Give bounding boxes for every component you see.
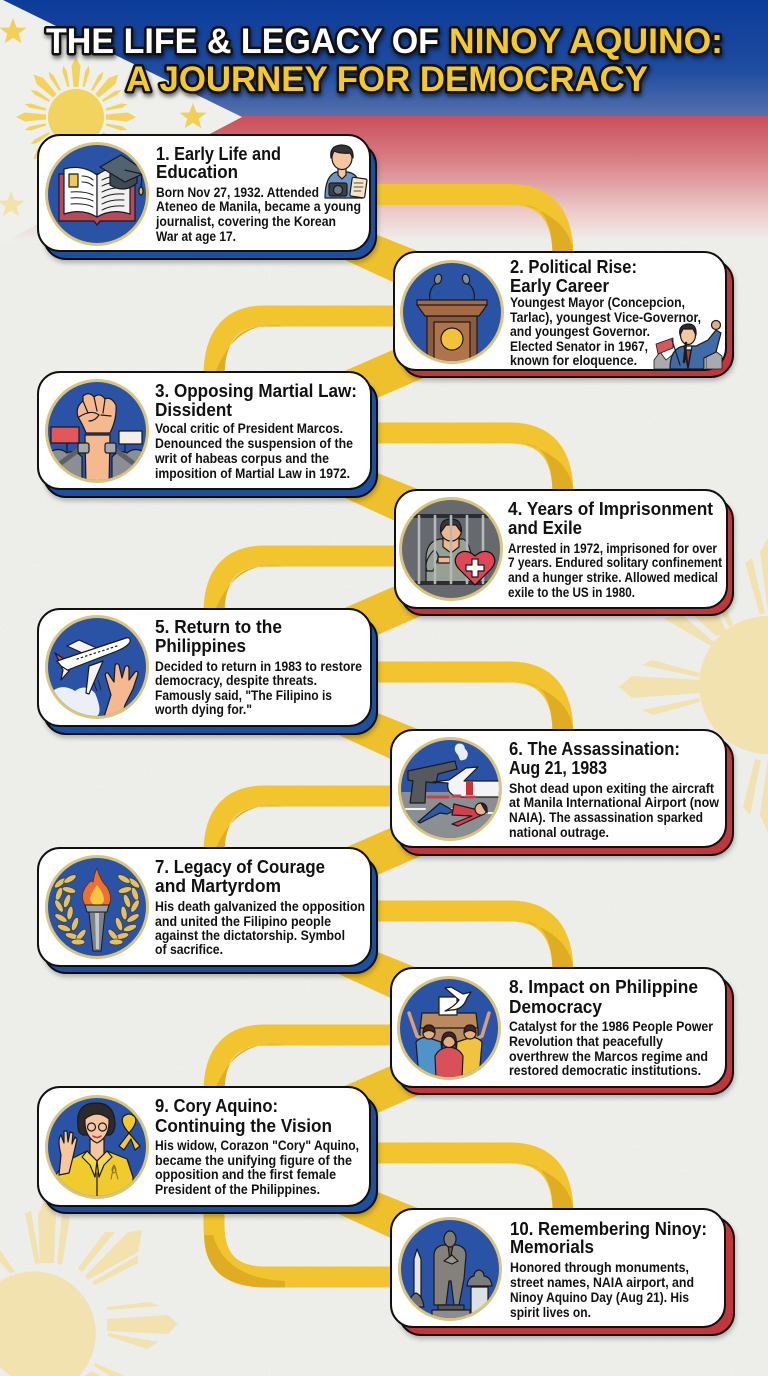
icon: orator with crowd [654,320,722,369]
body text [508,541,722,600]
body text [510,295,701,368]
panel: card 10 [391,1209,734,1335]
title: THE LIFE & LEGACY OF [46,22,439,61]
heading [155,616,282,656]
icon: torch and laurel wreath [45,855,149,959]
heading: and Martyrdom [155,875,281,896]
body text: Youngest Mayor (Concepcion, [510,295,685,310]
icon: open book and graduation cap [45,142,149,246]
icon: Cory Aquino with yellow ribbon [45,1095,149,1199]
body text [155,899,365,957]
body text: NAIA). The assassination sparked [509,810,703,825]
heading: Aug 21, 1983 [509,757,607,778]
icon: Ninoy Aquino statue and memorials [398,1217,502,1321]
body text: His widow, Corazon "Cory" Aquino, [155,1138,359,1153]
body text: Denounced the suspension of the [155,436,353,451]
connector: 9 to 10 lower loop [204,1200,400,1288]
body text: national outrage. [509,825,609,840]
body text: worth dying for." [154,702,252,717]
heading: Philippines [155,635,246,656]
heading: Continuing the Vision [155,1115,332,1136]
body text: Famously said, "The Filipino is [155,688,332,703]
body text: and a hunger strike. Allowed medical [508,570,718,585]
panel: card 4 [395,490,733,615]
body text: street names, NAIA airport, and [510,1275,694,1290]
heading: 4. Years of Imprisonment [508,498,713,519]
panel: card 2 [394,252,733,377]
sun: bottom left [0,1195,178,1376]
heading [510,1218,707,1257]
body text: exile to the US in 1980. [508,585,635,600]
body text: journalist, covering the Korean [155,214,336,229]
title: A JOURNEY FOR DEMOCRACY [126,60,648,99]
heading [508,498,713,538]
icon: prisoner behind bars with medical heart [399,497,503,601]
connector: 9 to 10 [330,1153,574,1240]
body text: of sacrifice. [155,942,223,957]
heading [156,143,281,182]
body text: Born Nov 27, 1932. Attended [156,185,319,200]
body text [155,185,361,244]
panel: card 3 [38,372,377,497]
title [46,22,723,99]
connector: 3 to 4 [330,433,574,521]
body text: Revolution that peacefully [509,1034,663,1049]
connector: 2 to 3 [214,316,430,399]
heading: Dissident [155,399,232,420]
icon: ballot box, dove and people [397,976,501,1080]
body text: Ninoy Aquino Day (Aug 21). His [510,1290,689,1305]
panel: card 5 [38,609,377,734]
body text: Vocal critic of President Marcos. [155,421,343,436]
heading: 3. Opposing Martial Law: [155,380,357,401]
heading: 10. Remembering Ninoy: [510,1218,707,1239]
body text: at Manila International Airport (now [509,795,719,810]
body text: Ateneo de Manila, became a young [156,199,361,214]
heading: Education [156,161,238,182]
heading: Memorials [510,1236,594,1257]
icon: gun, aircraft and fallen man [398,737,502,841]
heading [155,856,325,896]
body text: Elected Senator in 1967, [510,339,648,354]
body text: restored democratic institutions. [509,1063,701,1078]
body text [154,421,353,481]
body text [510,1260,694,1320]
body text: Decided to return in 1983 to restore [155,659,362,674]
body text: President of the Philippines. [155,1182,320,1197]
body text [155,1138,359,1197]
body text: Honored through monuments, [510,1260,689,1275]
icon: airplane and waving hand [45,615,149,719]
body text: became the unifying figure of the [155,1153,352,1168]
heading: 5. Return to the [155,616,282,637]
heading: 8. Impact on Philippine [509,976,698,997]
connector: 4 to 5 [214,556,430,636]
panel: card 1 [38,135,376,259]
heading [509,738,680,778]
connector: 6 to 7 [214,796,430,876]
body text: and united the Filipino people [155,914,331,929]
body text: imposition of Martial Law in 1972. [155,466,350,481]
heading [155,1095,332,1136]
body text: democracy, despite threats. [155,673,317,688]
body text: His death galvanized the opposition [155,899,365,914]
heading: 9. Cory Aquino: [155,1095,278,1116]
icon: raised fist breaking chains [45,379,149,486]
sun: right [619,538,768,833]
icon: young journalist with camera [325,145,367,198]
panel: card 6 [391,730,733,855]
heading: Early Career [510,275,609,296]
body text: opposition and the first female [155,1167,336,1182]
body text [509,781,719,840]
heading [155,380,357,420]
body text [154,659,362,717]
heading: 6. The Assassination: [509,738,680,759]
connector: 5 to 6 [330,672,574,761]
body text: writ of habeas corpus and the [154,451,329,466]
body text: against the dictatorship. Symbol [155,928,345,943]
connector: 8 to 9 [214,1035,430,1114]
body text: Tarlac), youngest Vice-Governor, [510,310,701,325]
panel: card 8 [391,968,733,1094]
body text: 7 years. Endured solitary confinement [508,555,722,570]
body text: Catalyst for the 1986 People Power [509,1019,714,1034]
Philippine flag backdrop [0,0,768,244]
heading [510,256,637,296]
body text: Arrested in 1972, imprisoned for over [508,541,718,556]
connector: 7 to 8 [330,911,574,1000]
heading: 2. Political Rise: [510,256,637,277]
sun and stars: top left [0,18,206,216]
body text: War at age 17. [156,229,236,244]
body text: spirit lives on. [510,1305,591,1320]
body text [509,1019,714,1078]
body text: known for eloquence. [510,353,637,368]
heading: 1. Early Life and [156,143,281,164]
body text: and youngest Governor. [510,324,650,339]
icon: podium with microphones [400,260,504,367]
body text: Shot dead upon exiting the aircraft [509,781,714,796]
panel: card 7 [38,848,377,973]
body text: overthrew the Marcos regime and [509,1049,708,1064]
connector: 1 to 2 [330,194,574,283]
panel: card 9 [38,1087,377,1213]
heading: 7. Legacy of Courage [155,856,325,877]
heading: Democracy [509,996,603,1017]
heading [509,976,698,1017]
heading: and Exile [508,517,582,538]
title: NINOY AQUINO: [449,22,723,61]
